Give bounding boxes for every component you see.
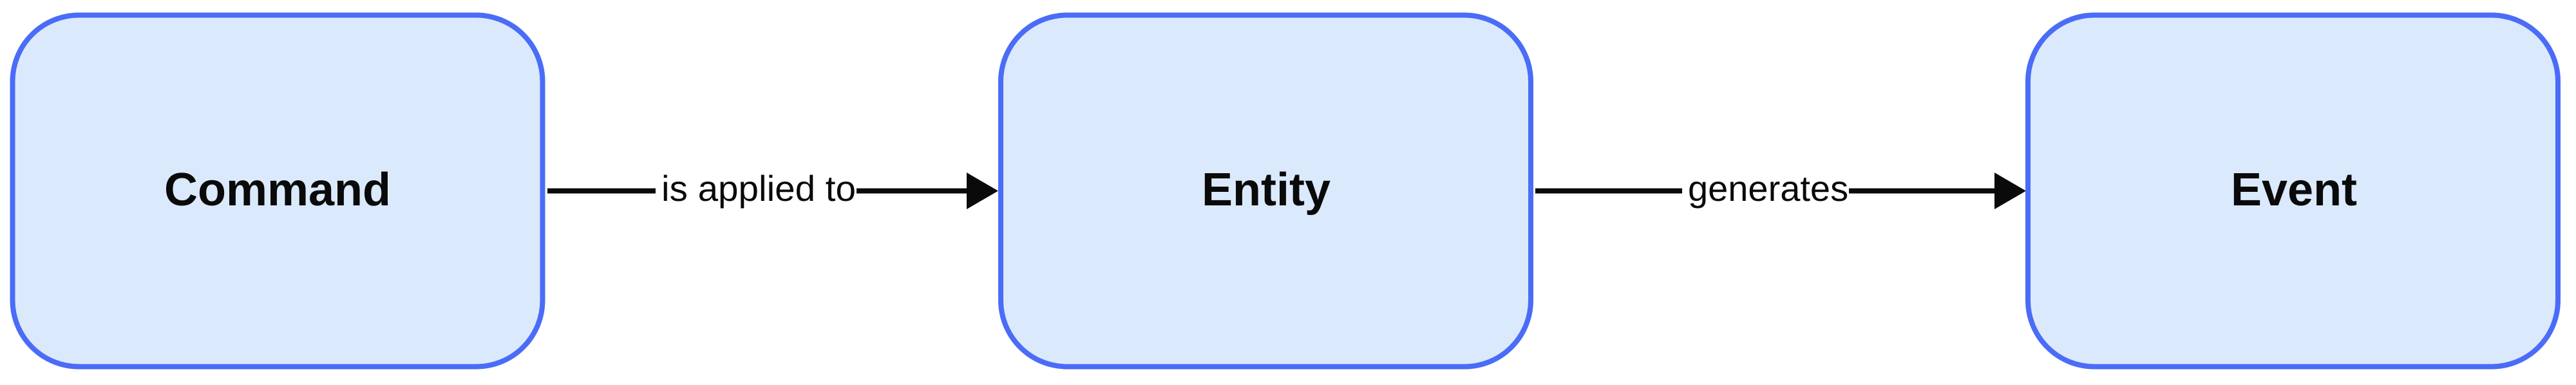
panel: Command [13,15,542,367]
heading: Entity: Entity [1202,164,1331,216]
heading: Command: Command [164,164,391,216]
panel: Entity [1001,15,1531,367]
heading: Event: Event [2231,164,2357,216]
arrow: is applied to [547,168,998,209]
arrow label: generates: generates [1688,168,1848,209]
panel: Event [2028,15,2558,367]
arrow label: is applied to: is applied to [661,168,856,209]
arrow: generates [1535,168,2026,209]
